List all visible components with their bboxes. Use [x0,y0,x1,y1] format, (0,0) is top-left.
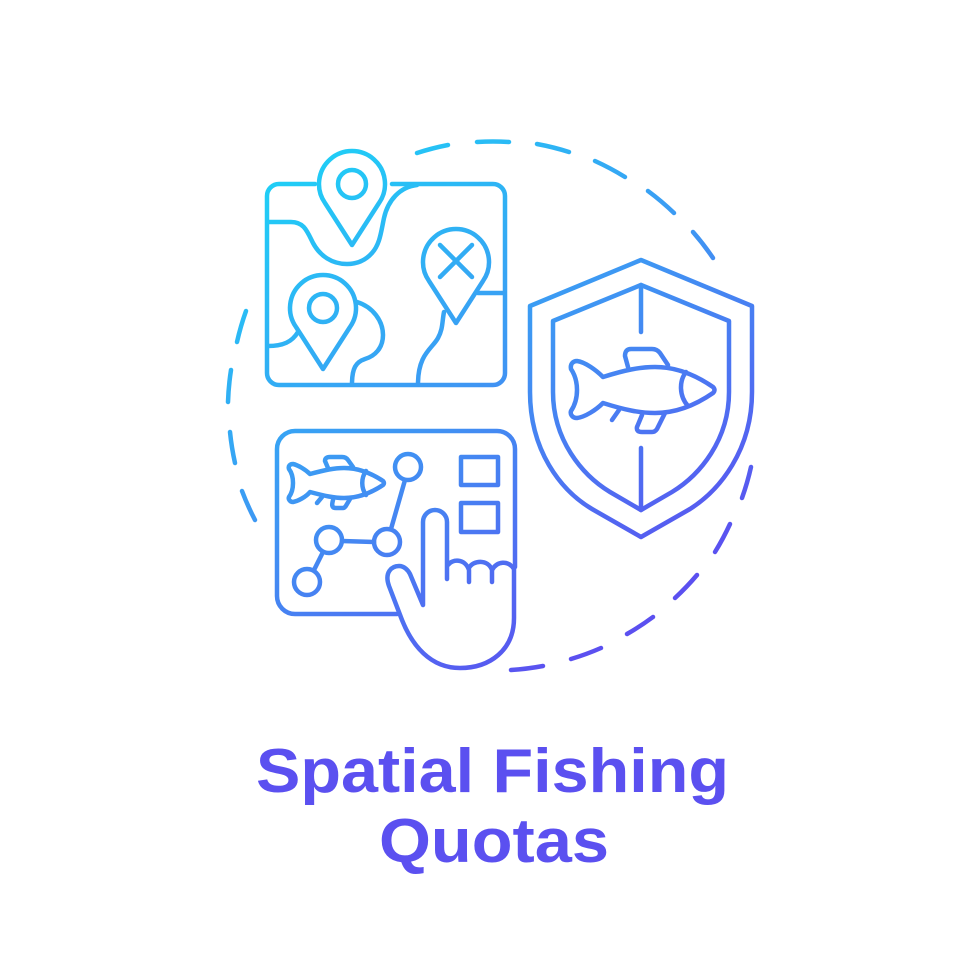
title: Spatial Fishing [256,737,729,806]
shield centre lines [639,285,643,510]
map contour lines [268,185,503,384]
node graph [294,454,421,595]
icon: map with location pins [267,151,505,385]
icon: pointing hand [387,510,514,668]
icon: shield with fish [530,260,752,537]
option boxes [461,457,498,532]
icon: excluded location pin [423,229,489,323]
dashed circle ring [228,142,751,670]
title [256,737,729,876]
icon: touch screen with fish and data nodes [277,431,515,668]
shield inner [553,285,729,510]
title: Quotas [379,807,609,876]
screen frame [277,431,515,614]
icon: location pin top [319,151,385,245]
icon: small fish [289,457,384,508]
icon: large fish [571,349,714,432]
icon: location pin left [290,275,356,369]
map frame [267,184,505,385]
shield outer [530,260,752,537]
